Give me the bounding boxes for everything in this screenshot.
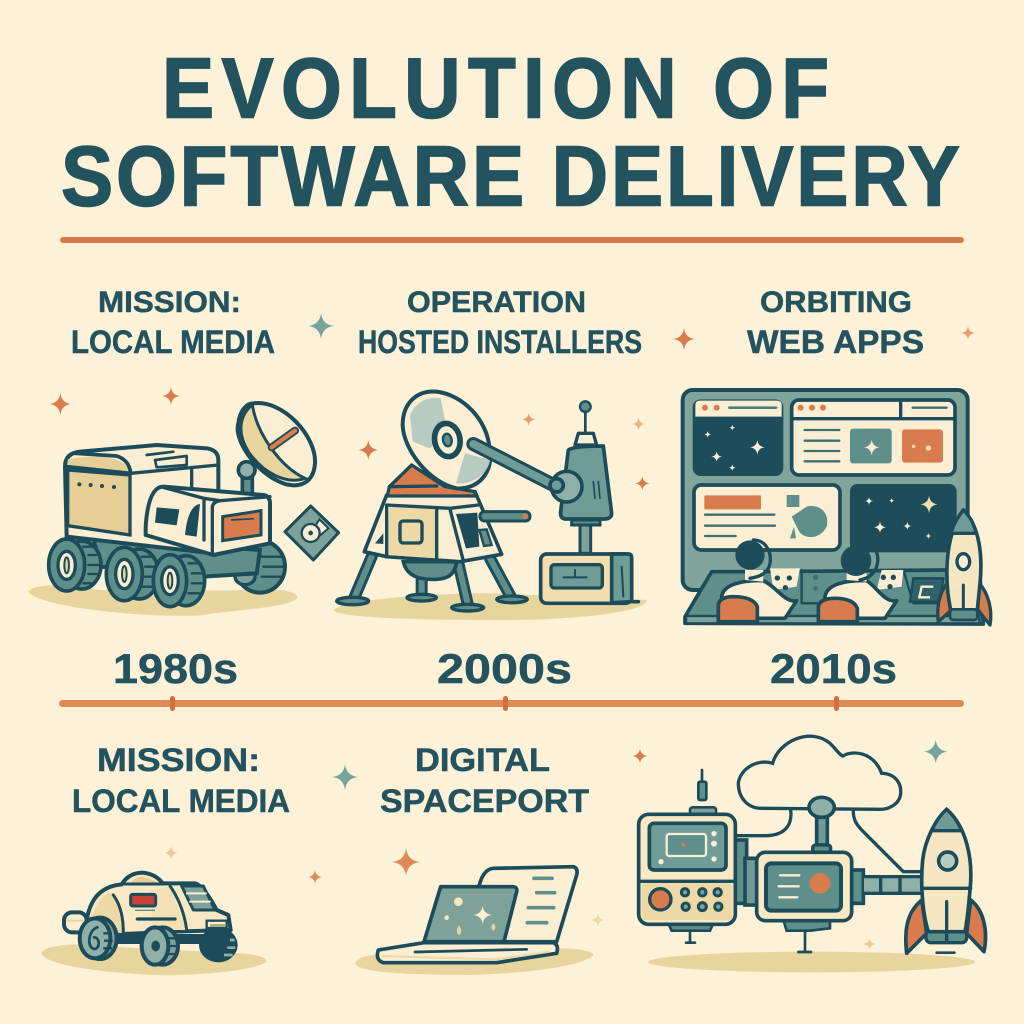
lander legs	[337, 557, 527, 611]
rocket	[938, 510, 991, 625]
conveyor tube	[732, 840, 923, 905]
label: mission local media (top): LOCAL MEDIA	[71, 324, 275, 360]
window: article with map	[694, 485, 840, 550]
year labels	[113, 645, 897, 692]
control unit B	[757, 852, 852, 952]
label: mission local media (bottom): LOCAL MEDIA	[72, 783, 290, 819]
illustration: cloud pipeline launching rocket	[632, 736, 986, 972]
rover front wheels	[49, 539, 205, 607]
decorative sparkles, bottom row	[164, 764, 605, 927]
robot control box	[541, 554, 638, 603]
lander body	[364, 465, 530, 562]
small rover front wheels	[80, 918, 178, 965]
label: operation hosted installers	[358, 286, 642, 360]
laptop screen	[424, 887, 517, 942]
mast and dish	[238, 403, 315, 495]
floppy disk	[285, 506, 339, 560]
label: digital spaceport	[380, 742, 589, 819]
year labels: 2000s	[437, 645, 572, 692]
illustration: small rover	[42, 873, 267, 975]
label: digital spaceport: SPACEPORT	[380, 783, 589, 819]
rover chassis	[93, 538, 260, 577]
floating document	[479, 867, 577, 942]
pipeline ground shadow	[648, 952, 975, 972]
CD dish	[403, 392, 490, 488]
lander belly	[403, 562, 457, 579]
title: EVOLUTION OF	[162, 42, 829, 136]
operator 1	[718, 540, 797, 622]
rover ground shadow	[28, 585, 297, 616]
label: digital spaceport: DIGITAL	[415, 742, 550, 778]
launch rocket	[906, 809, 986, 953]
label: orbiting web apps: ORBITING	[760, 286, 912, 319]
control console	[685, 568, 983, 624]
illustration: mission control with web app screens	[683, 390, 991, 625]
illustration: lunar rover with dish and floppy disk	[28, 387, 339, 616]
mast to cloud	[809, 797, 834, 852]
robot arm	[473, 444, 553, 485]
title	[61, 42, 960, 224]
rover cab	[146, 487, 270, 555]
year labels: 1980s	[113, 645, 238, 692]
laptop shadow	[355, 948, 593, 975]
operator 2	[818, 545, 897, 622]
lander ground shadow	[333, 593, 647, 620]
year labels: 2010s	[770, 645, 897, 692]
cloud outline	[738, 736, 901, 809]
timeline	[59, 696, 964, 711]
cables	[735, 810, 923, 872]
label: mission local media (top): MISSION:	[98, 286, 241, 319]
label: orbiting web apps	[747, 286, 924, 360]
window: starfield 1	[693, 399, 783, 476]
window: starfield 2	[850, 484, 957, 552]
title: SOFTWARE DELIVERY	[61, 130, 960, 224]
mission control monitor frame	[683, 390, 968, 590]
illustration: lander with CD dish and robot tower	[333, 392, 650, 620]
laptop base	[377, 943, 557, 963]
small rover rear wheel	[199, 928, 238, 962]
rover cargo body	[65, 445, 218, 553]
label: operation hosted installers: OPERATION	[407, 286, 586, 319]
control unit A	[639, 770, 735, 943]
label: mission local media (bottom)	[72, 742, 290, 819]
illustration: laptop with floating page	[355, 867, 593, 975]
window: web page	[792, 400, 955, 475]
label: mission local media (top)	[71, 286, 275, 360]
label: orbiting web apps: WEB APPS	[747, 324, 924, 360]
label: mission local media (bottom): MISSION:	[97, 742, 260, 778]
rover rear wheel	[235, 541, 285, 593]
label: operation hosted installers: HOSTED INSTALLERS	[358, 324, 642, 360]
small rover shadow	[42, 945, 267, 975]
decorative sparkles, top row	[308, 313, 975, 350]
robot tower	[550, 401, 612, 553]
small rover body	[64, 873, 231, 944]
